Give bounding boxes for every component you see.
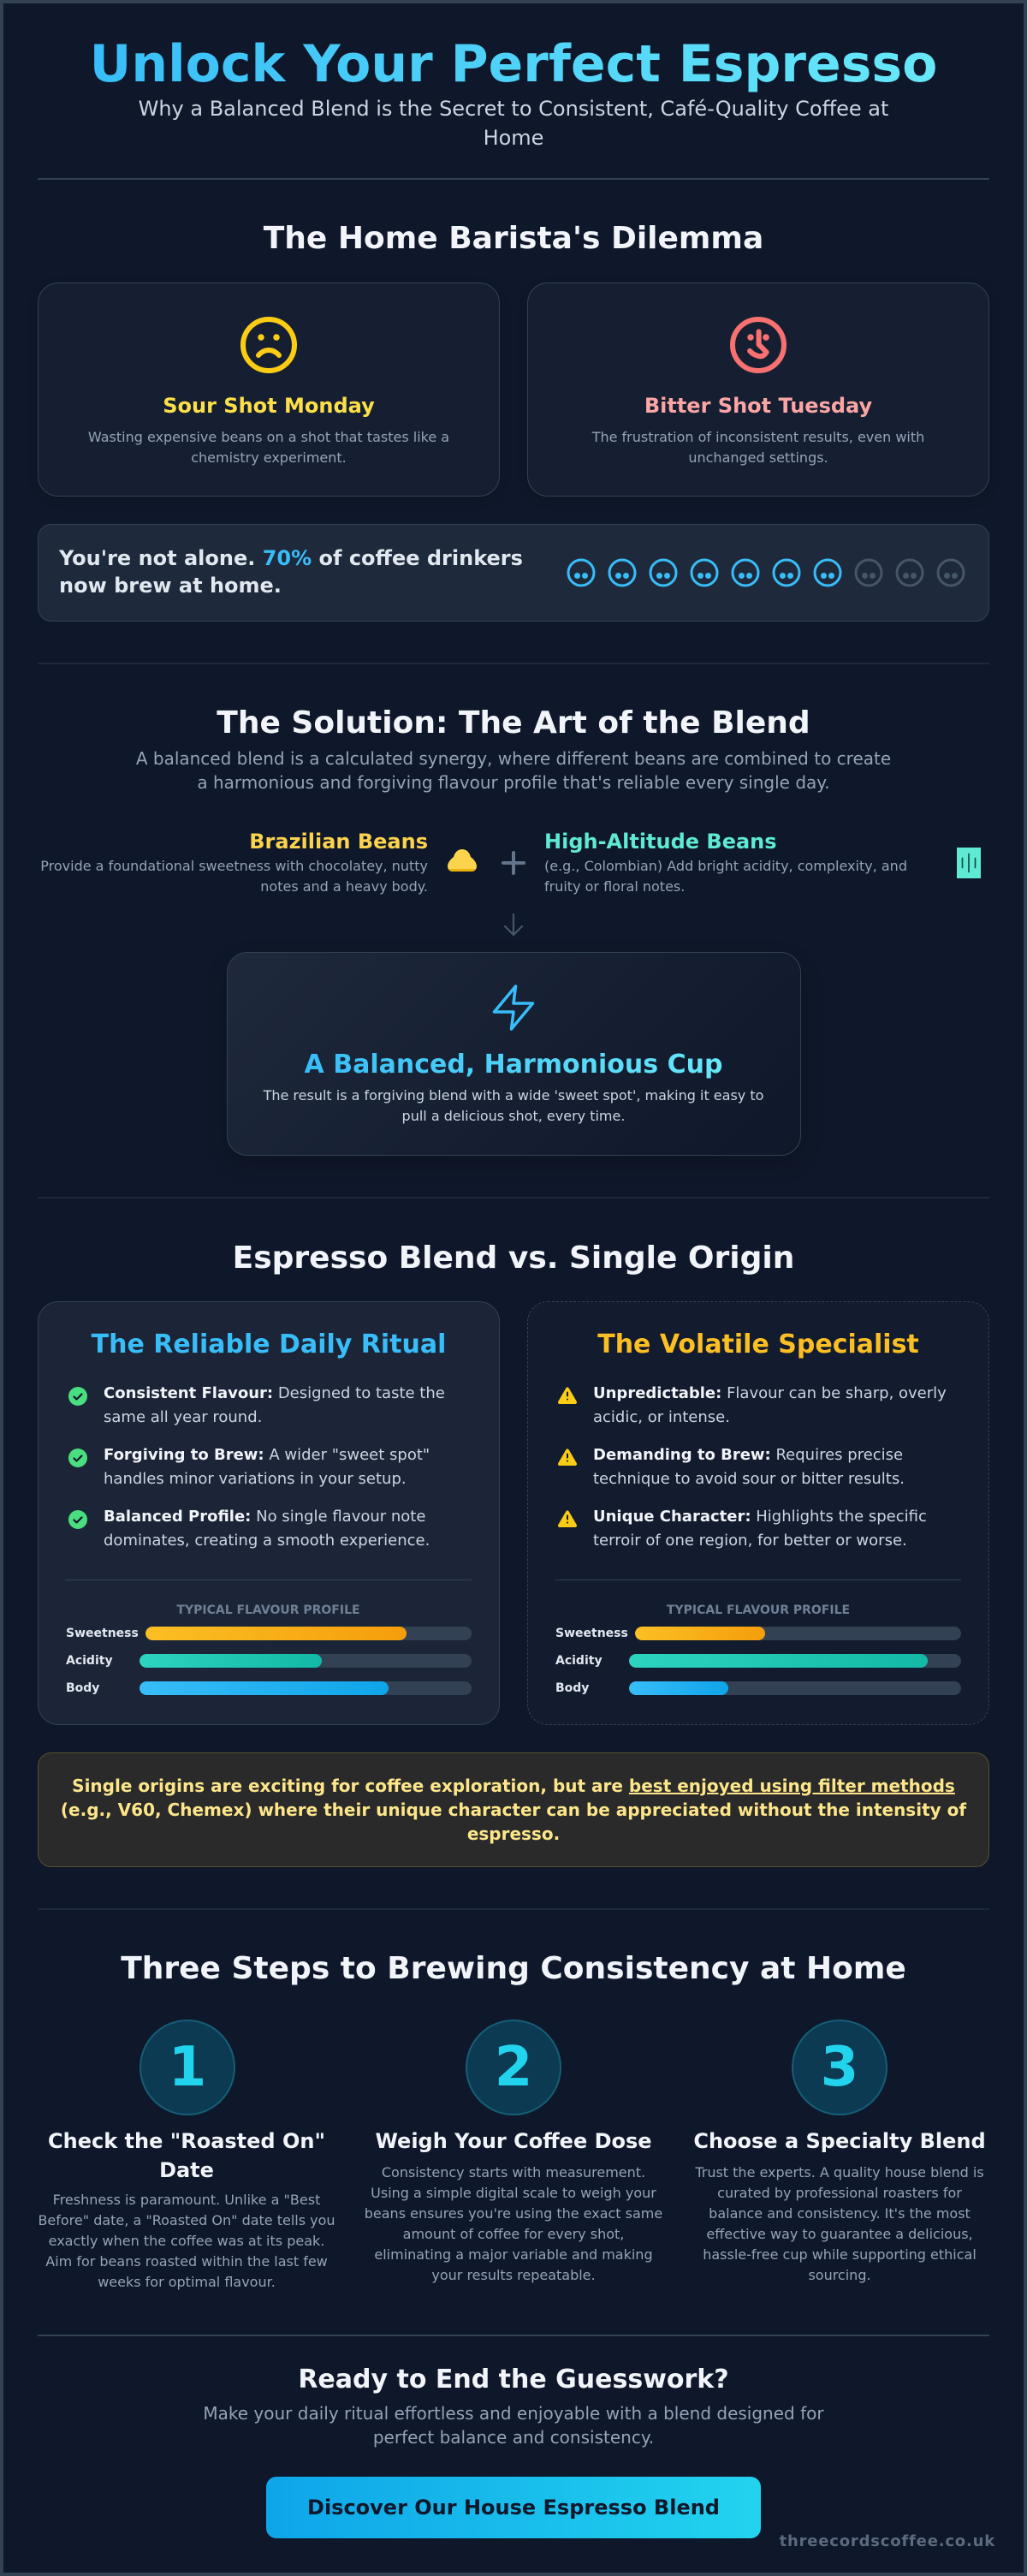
single origin heading: The Volatile Specialist: [597, 1330, 919, 1359]
step 3 number: [792, 2020, 887, 2115]
result text: pull a delicious shot, every time.: [402, 1108, 625, 1124]
step 1 text: Before" date, a "Roasted On" date tells you: [38, 2212, 335, 2228]
single origin body label: Body: [555, 1681, 589, 1695]
step 3 text: effective way to guarantee a delicious,: [706, 2226, 973, 2242]
callout: filter methods note: [38, 1752, 989, 1867]
single origin body bar: [629, 1681, 961, 1695]
step 1 text: Aim for beans roasted within the last few: [45, 2253, 328, 2270]
unique character: terroir of one region, for better or worse.: [593, 1532, 907, 1550]
blend acidity bar: [140, 1654, 472, 1668]
button: discover our house espresso blend: Discover Our House Espresso Blend: [307, 2496, 720, 2519]
blend sweetness label: Sweetness: [66, 1627, 139, 1640]
step 1 text: weeks for optimal flavour.: [98, 2274, 276, 2290]
blend heading: The Reliable Daily Ritual: [92, 1330, 446, 1359]
balanced profile: [104, 1508, 430, 1550]
step 2 text: Consistency starts with measurement.: [382, 2164, 645, 2180]
icon: warning 1: [558, 1387, 577, 1404]
high-altitude beans text: [544, 858, 907, 895]
panel: the reliable daily ritual: [38, 1301, 500, 1725]
subtitle: Why a Balanced Blend is the Secret to Consistent, Café-Quality Coffee at: [139, 97, 888, 121]
step 1 text: [38, 2192, 335, 2290]
step 2 text: your results repeatable.: [431, 2267, 596, 2283]
solution intro: a harmonious and forgiving flavour profile that's reliable every single day.: [197, 772, 830, 793]
result heading: A Balanced, Harmonious Cup: [305, 1050, 722, 1080]
high-altitude beans text: (e.g., Colombian) Add bright acidity, complexity, and: [544, 858, 907, 874]
step 3 text: [695, 2164, 984, 2283]
step 1 text: Freshness is paramount. Unlike a "Best: [53, 2192, 320, 2208]
sour shot text: chemistry experiment.: [191, 449, 347, 466]
bitter shot heading: Bitter Shot Tuesday: [644, 394, 872, 418]
sour shot heading: Sour Shot Monday: [163, 394, 375, 418]
single origin flavour profile label: TYPICAL FLAVOUR PROFILE: [667, 1603, 850, 1617]
call to action text: [203, 2403, 824, 2448]
step 2 number: [466, 2020, 561, 2115]
consistent flavour: Consistent Flavour: Designed to taste the: [104, 1384, 445, 1402]
blend flavour profile label: TYPICAL FLAVOUR PROFILE: [176, 1603, 360, 1617]
sour shot text: [88, 429, 449, 466]
icon: plus: [502, 851, 525, 875]
call to action text: Make your daily ritual effortless and enjoyable with a blend designed for: [203, 2403, 824, 2424]
callout text: [61, 1776, 967, 1844]
brazilian beans heading: Brazilian Beans: [249, 830, 428, 854]
step 2 text: eliminating a major variable and making: [374, 2246, 653, 2263]
heading: the home barista's dilemma: The Home Barista's Dilemma: [264, 221, 763, 256]
high-altitude beans heading: High-Altitude Beans: [544, 830, 777, 854]
solution intro: [136, 748, 891, 793]
step 3 text: Trust the experts. A quality house blend is: [695, 2164, 984, 2180]
step 3 text: balance and consistency. It's the most: [709, 2205, 971, 2222]
heading: blend vs single origin: Espresso Blend vs. Single Origin: [233, 1240, 794, 1276]
brazilian beans text: Provide a foundational sweetness with chocolatey, nutty: [40, 858, 428, 874]
unpredictable: Unpredictable: Flavour can be sharp, overly: [593, 1384, 947, 1402]
step 1 number: [140, 2020, 235, 2115]
step 2 number: 2: [495, 2036, 532, 2099]
callout text: (e.g., V60, Chemex) where their unique character can be appreciated without the intensity of: [61, 1800, 966, 1820]
step 3 text: hassle-free cup while supporting ethical: [703, 2246, 977, 2263]
step 2 text: Using a simple digital scale to weigh your: [371, 2185, 656, 2201]
statistic text: You're not alone. 70% of coffee drinkers: [59, 546, 523, 570]
call to action text: perfect balance and consistency.: [373, 2427, 654, 2448]
icon: brazilian bean: [448, 849, 477, 872]
bitter shot text: unchanged settings.: [688, 449, 828, 466]
step 1 number: 1: [169, 2036, 206, 2099]
brazilian beans text: [40, 858, 428, 895]
single origin sweetness bar: [635, 1627, 961, 1640]
result text: The result is a forgiving blend with a wide 'sweet spot', making it easy to: [264, 1087, 763, 1104]
icon: check 3: [68, 1510, 87, 1529]
statistic text: [58, 546, 523, 598]
icon: check 2: [68, 1449, 87, 1467]
step 2 text: amount of coffee for every shot,: [403, 2226, 624, 2242]
step 1 heading: [48, 2129, 325, 2182]
step 3 text: curated by professional roasters for: [717, 2185, 962, 2201]
demanding to brew: Demanding to Brew: Requires precise: [593, 1446, 903, 1464]
forgiving to brew: handles minor variations in your setup.: [104, 1470, 407, 1488]
step 1 text: exactly when the coffee was at its peak.: [49, 2233, 324, 2249]
step 1 heading: Check the "Roasted On": [48, 2129, 325, 2153]
consistent flavour: [104, 1384, 445, 1426]
panel: statistic: [38, 524, 989, 622]
icon: warning 3: [558, 1510, 577, 1527]
high-altitude beans text: fruity or floral notes.: [544, 878, 685, 895]
step 1 heading: Date: [159, 2158, 214, 2182]
icon: lightning bolt: [493, 985, 534, 1031]
icon: high-altitude bean: [957, 848, 981, 878]
blend body bar: [140, 1681, 472, 1695]
icon row: 7 of 10 people: [567, 558, 965, 587]
demanding to brew: [593, 1446, 905, 1488]
panel: bitter shot tuesday: [527, 283, 989, 497]
heading: the solution: The Solution: The Art of the Blend: [217, 705, 810, 741]
icon: check 1: [68, 1387, 87, 1406]
bitter shot text: The frustration of inconsistent results, even with: [592, 429, 924, 445]
icon: bitter face: [730, 317, 787, 373]
panel: balanced cup result: [227, 952, 801, 1156]
single origin acidity label: Acidity: [555, 1654, 603, 1668]
step 3 number: 3: [821, 2036, 858, 2099]
unique character: Unique Character: Highlights the specific: [593, 1508, 927, 1526]
panel: the volatile specialist: [527, 1301, 989, 1725]
forgiving to brew: Forgiving to Brew: A wider "sweet spot": [104, 1446, 430, 1464]
sour shot text: Wasting expensive beans on a shot that tastes like a: [88, 429, 449, 445]
unique character: [593, 1508, 927, 1550]
step 3 text: sourcing.: [808, 2267, 871, 2283]
step 3 heading: Choose a Specialty Blend: [693, 2129, 986, 2153]
brazilian beans text: notes and a heavy body.: [260, 878, 428, 895]
step 2 text: [365, 2164, 662, 2283]
heading: ready to end the guesswork: Ready to End the Guesswork?: [298, 2365, 729, 2395]
callout text: espresso.: [467, 1823, 560, 1844]
heading: three steps: Three Steps to Brewing Consistency at Home: [121, 1951, 906, 1986]
unpredictable: [593, 1384, 947, 1426]
balanced profile: Balanced Profile: No single flavour note: [104, 1508, 425, 1526]
unpredictable: acidic, or intense.: [593, 1408, 730, 1426]
result text: [264, 1087, 763, 1124]
footer url: threecordscoffee.co.uk: [780, 2532, 995, 2550]
bitter shot text: [592, 429, 924, 466]
panel: sour shot monday: [38, 283, 500, 497]
solution intro: A balanced blend is a calculated synergy, where different beans are combined to create: [136, 748, 891, 769]
icon: warning 2: [558, 1449, 577, 1466]
icon: sad face: [240, 317, 297, 373]
forgiving to brew: [104, 1446, 430, 1488]
step 2 text: beans ensures you're using the exact same: [365, 2205, 662, 2222]
statistic text: now brew at home.: [59, 574, 282, 598]
demanding to brew: technique to avoid sour or bitter results.: [593, 1470, 905, 1488]
title: Unlock Your Perfect Espresso: [90, 34, 937, 94]
blend sweetness bar: [145, 1627, 472, 1640]
subtitle: Home: [484, 126, 543, 150]
subtitle: [139, 97, 888, 150]
blend acidity label: Acidity: [66, 1654, 113, 1668]
consistent flavour: same all year round.: [104, 1408, 262, 1426]
step 2 heading: Weigh Your Coffee Dose: [375, 2129, 652, 2153]
single origin sweetness label: Sweetness: [555, 1627, 628, 1640]
callout text: Single origins are exciting for coffee exploration, but are best enjoyed using filter methods: [72, 1776, 955, 1796]
balanced profile: dominates, creating a smooth experience.: [104, 1532, 430, 1550]
button: discover our house espresso blend: [266, 2477, 761, 2538]
single origin acidity bar: [629, 1654, 961, 1668]
arrow: down to result: [504, 913, 523, 936]
blend body label: Body: [66, 1681, 99, 1695]
